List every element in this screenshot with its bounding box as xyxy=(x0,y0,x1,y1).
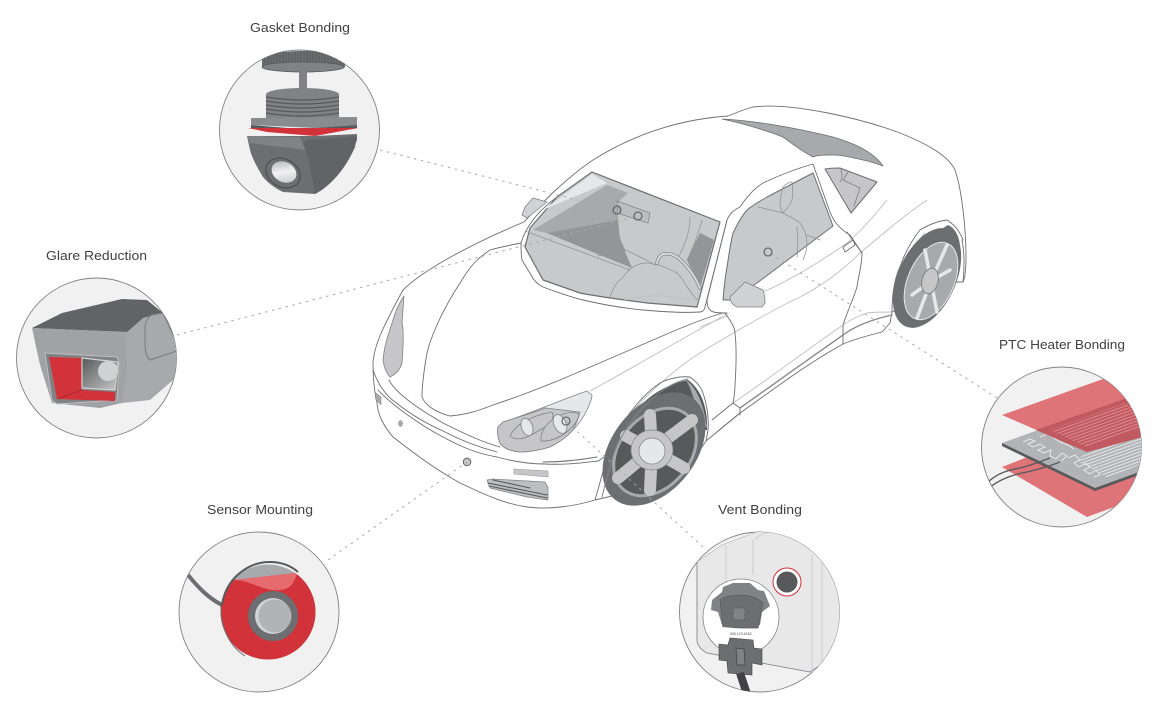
steering wheel xyxy=(657,254,700,288)
icon: vent on connector housing xyxy=(696,532,840,692)
side mirror right xyxy=(730,282,765,307)
windshield and interior xyxy=(525,172,720,307)
rear wheel xyxy=(879,218,975,338)
bumper plate xyxy=(514,469,548,477)
icon: parking sensor with red adhesive xyxy=(187,561,316,660)
panel: sensor mounting xyxy=(179,502,339,692)
side window and seat xyxy=(723,173,833,300)
sill and doors xyxy=(521,164,964,431)
rear quarter window xyxy=(825,168,877,213)
icon: layered heater xyxy=(988,379,1156,517)
car body outline xyxy=(373,106,966,508)
heading: vent bonding: Vent Bonding xyxy=(718,502,802,517)
icon: camera housing xyxy=(32,299,180,408)
fender side light xyxy=(383,296,404,377)
car illustration xyxy=(373,106,975,525)
part number: 000 123 4218 xyxy=(730,632,751,636)
body character lines xyxy=(590,200,927,417)
headlight xyxy=(498,391,592,452)
side mirror left xyxy=(522,198,547,218)
heading: ptc heater bonding: PTC Heater Bonding xyxy=(999,337,1125,352)
front wheel xyxy=(582,373,726,525)
front grille xyxy=(487,479,548,500)
circle: vent bonding xyxy=(680,532,840,692)
bumper details xyxy=(375,392,402,426)
rear view camera housing xyxy=(617,201,650,223)
leader lines xyxy=(177,150,997,560)
panel: ptc heater bonding xyxy=(982,337,1156,527)
circle: ptc heater bonding xyxy=(982,367,1142,527)
circle: gasket bonding xyxy=(220,50,380,210)
panel: gasket bonding xyxy=(220,20,380,210)
heading: sensor mounting: Sensor Mounting xyxy=(207,502,313,517)
heading: gasket bonding: Gasket Bonding xyxy=(250,20,350,35)
panel: vent bonding xyxy=(680,502,850,694)
panel: glare reduction xyxy=(16,248,180,438)
markers xyxy=(562,206,772,425)
sensor spot xyxy=(463,458,471,466)
heading: glare reduction: Glare Reduction xyxy=(46,248,147,263)
rear window xyxy=(722,119,883,166)
icon: camera with gasket xyxy=(247,51,358,194)
circle: glare reduction xyxy=(16,278,176,438)
circle: sensor mounting xyxy=(179,532,339,692)
